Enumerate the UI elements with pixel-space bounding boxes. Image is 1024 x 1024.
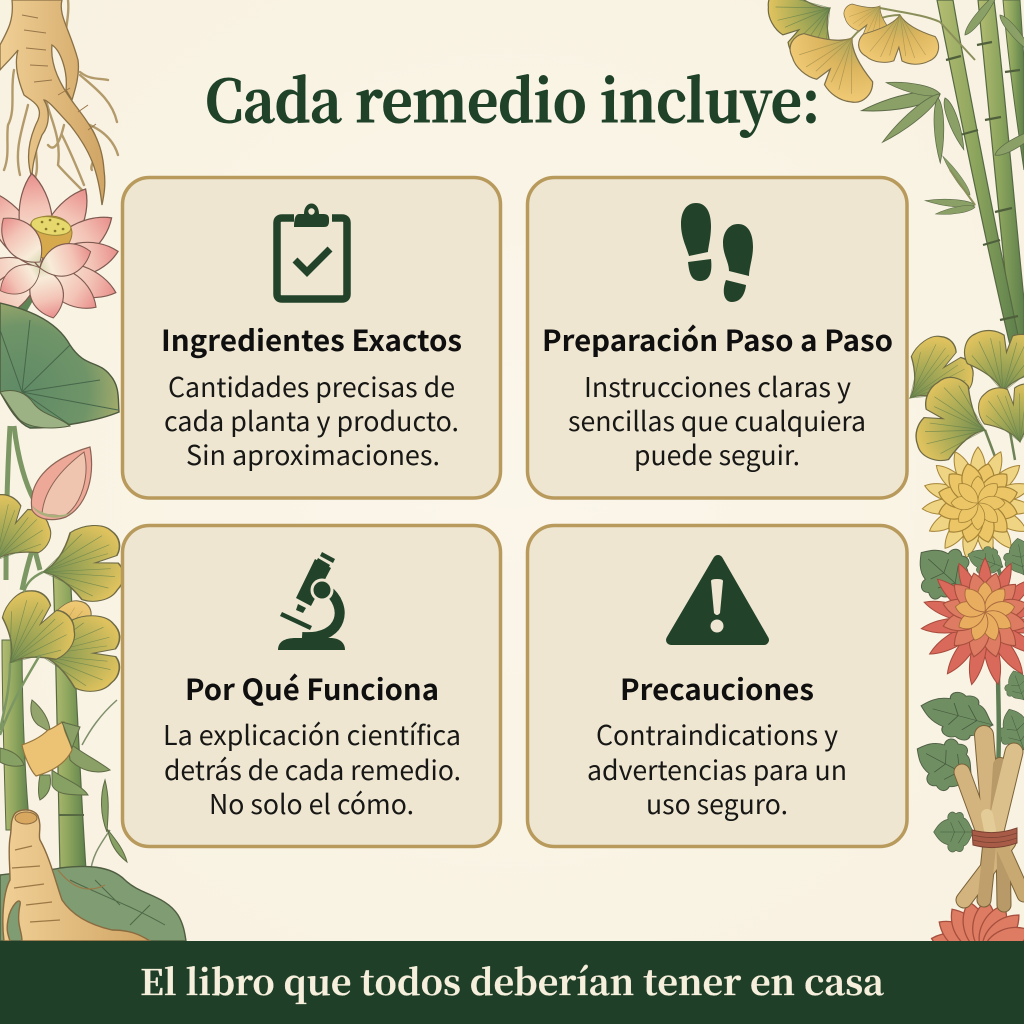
illustration: bottom red flower — [929, 899, 1024, 963]
illustration: lotus stems — [6, 426, 45, 590]
heading: por qué funciona: Por Qué Funciona — [185, 667, 439, 709]
illustration: red chrysanthemum — [921, 558, 1024, 770]
illustration: yellow chrysanthemum — [921, 447, 1024, 590]
illustration: ginkgo leaves middle right — [888, 327, 1024, 470]
footer text: El libro que todos deberían tener en casa — [140, 956, 885, 1006]
panel: ingredientes exactos — [122, 178, 500, 498]
text: precauciones description — [587, 714, 847, 822]
text: ingredientes description — [164, 366, 459, 473]
illustration: ginseng root bottom left — [0, 810, 186, 941]
text: por qué description — [163, 714, 461, 822]
text: ingredientes description: cada planta y producto. — [164, 400, 459, 439]
illustration: large leaf bottom left — [0, 866, 186, 941]
text: precauciones description: Contraindications y — [596, 714, 838, 753]
illustration: lotus bud — [31, 447, 92, 520]
illustration: bamboo stalks — [937, 0, 1024, 345]
illustration: chrysanthemum leaves — [903, 533, 1024, 852]
text: preparación description: Instrucciones claras y — [584, 366, 851, 405]
illustration: ginseng root top left — [0, 0, 118, 205]
illustration: left botanical border — [0, 0, 186, 941]
heading: preparación paso a paso: Preparación Paso a Paso — [542, 318, 893, 360]
text: preparación description: puede seguir. — [634, 434, 800, 473]
illustration: bamboo stalk left — [2, 570, 86, 870]
icon: warning triangle — [671, 560, 764, 640]
heading: ingredientes exactos: Ingredientes Exactos — [161, 318, 462, 360]
panel: precauciones — [528, 526, 907, 846]
footer banner — [0, 941, 1024, 1024]
text: por qué description: detrás de cada remedio. — [164, 749, 461, 788]
icon: footprints — [681, 203, 753, 302]
illustration: root bundle — [962, 735, 1024, 905]
text: ingredientes description: Cantidades precisas de — [168, 366, 455, 405]
illustration: bundle tie — [972, 828, 1017, 848]
illustration: lotus leaf — [0, 303, 119, 428]
text: por qué description: No solo el cómo. — [209, 783, 414, 822]
panel: por qué funciona — [122, 526, 500, 846]
illustration: bamboo leaves — [852, 0, 1024, 217]
illustration: small flower and leaves — [0, 700, 127, 875]
text: preparación description: sencillas que cualquiera — [568, 400, 866, 439]
illustration: ginkgo leaves left — [0, 487, 129, 735]
text: precauciones description: uso seguro. — [646, 783, 788, 822]
text: ingredientes description: Sin aproximaciones. — [186, 434, 440, 473]
text: precauciones description: advertencias para un — [587, 749, 847, 788]
icon: microscope — [278, 552, 345, 650]
illustration: right botanical border — [757, 0, 1024, 963]
heading: precauciones: Precauciones — [620, 667, 814, 709]
panel: preparación paso a paso — [528, 178, 907, 498]
text: por qué description: La explicación científica — [163, 714, 461, 753]
illustration: ginkgo leaves top right — [757, 0, 940, 111]
title: Cada remedio incluye: — [205, 55, 820, 139]
icon: clipboard with check — [277, 204, 347, 299]
illustration: lotus flower — [0, 172, 121, 334]
text: preparación description — [568, 366, 866, 473]
